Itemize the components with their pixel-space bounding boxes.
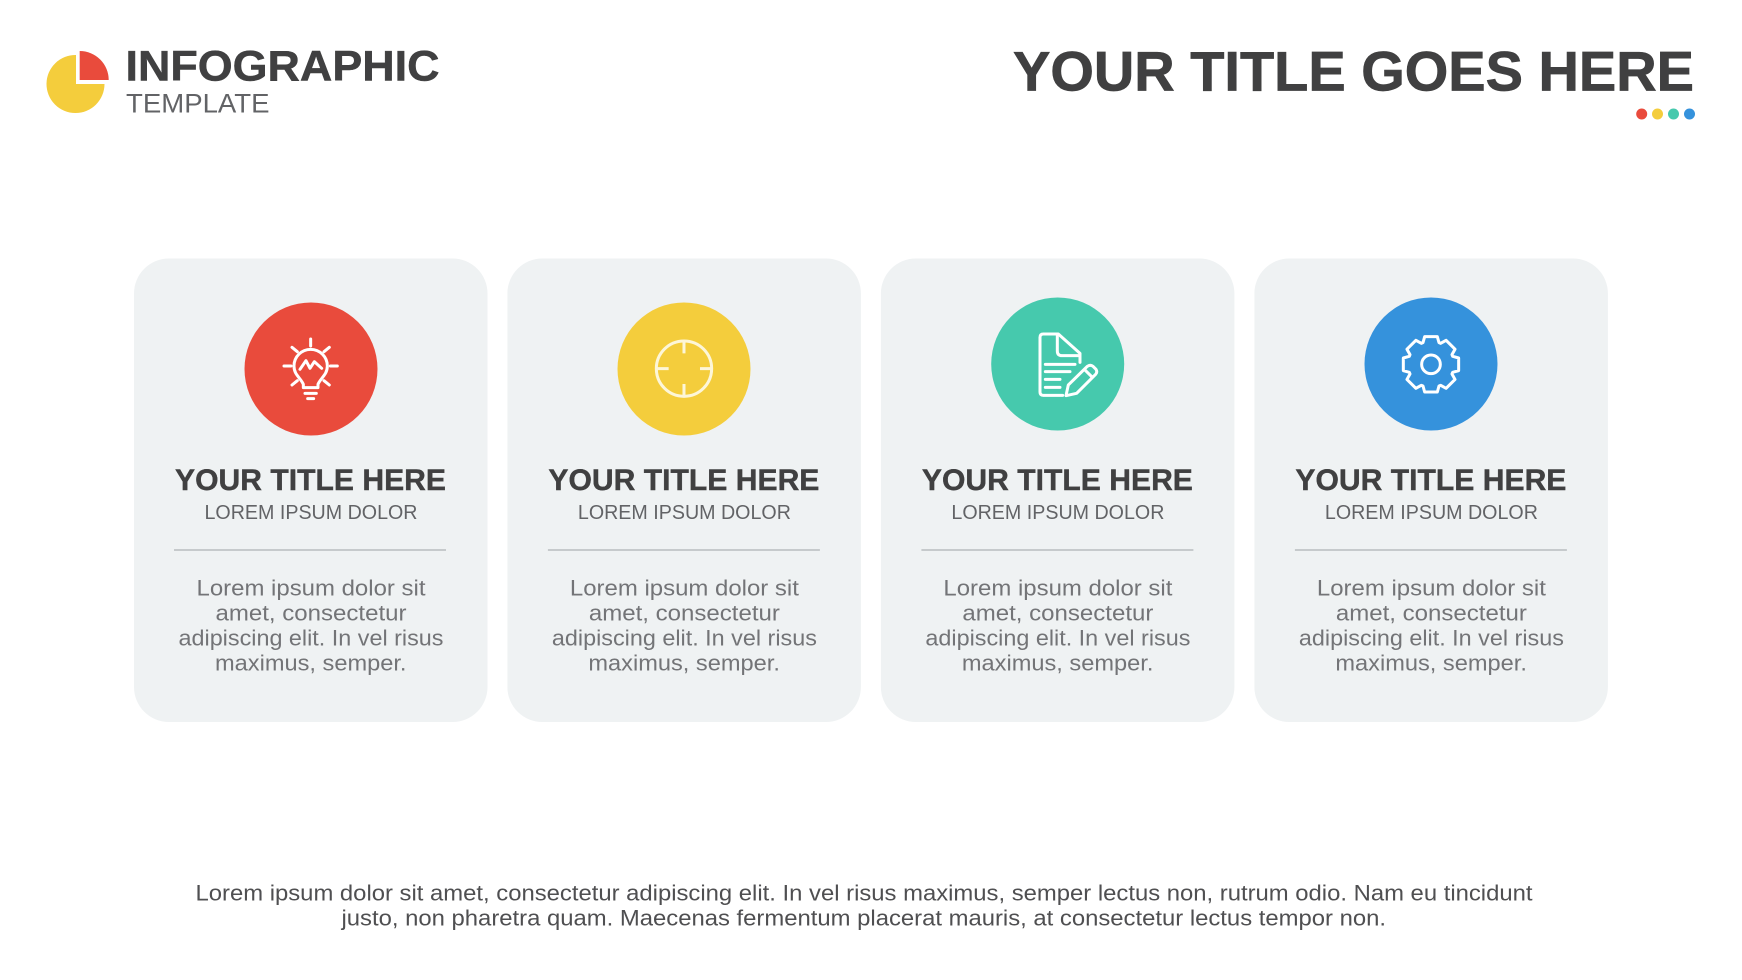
footer text [196,880,1533,930]
icon: document with pencil [1040,334,1097,396]
icon: crosshair target [656,341,712,396]
logo: pie chart icon [46,51,109,113]
panel: card 2 [507,258,861,722]
card 3 body text: Lorem ipsum dolor sit [943,576,1173,600]
card 2 heading: YOUR TITLE HERE [548,464,819,497]
card 3 subheading: LOREM IPSUM DOLOR [951,502,1164,524]
card 4 body text: Lorem ipsum dolor sit [1317,576,1547,600]
card 4 subheading: LOREM IPSUM DOLOR [1325,502,1538,524]
card 1 body text: amet, consectetur [216,600,407,626]
card 2 body text: maximus, semper. [588,650,780,676]
card 1 icon circle [244,302,378,436]
card 4 body text: amet, consectetur [1336,600,1527,626]
card 1 heading: YOUR TITLE HERE [175,464,446,497]
decorative colour dots [1636,108,1695,120]
card 3 body text: maximus, semper. [962,650,1153,676]
card 3 body text [925,576,1190,676]
card 1 body text [178,576,444,676]
card 3 icon circle [991,298,1124,430]
card 1 background [134,258,488,722]
logo text: TEMPLATE [126,89,270,119]
card 3 body text: amet, consectetur [962,600,1154,626]
card 2 body text: Lorem ipsum dolor sit [570,576,800,600]
card 1 subheading: LOREM IPSUM DOLOR [204,502,418,524]
card 1 body text: maximus, semper. [215,650,406,676]
card 2 body text [552,576,817,676]
logo text [126,42,440,119]
card 2 icon circle [618,302,750,436]
card 4 body text: maximus, semper. [1335,650,1527,676]
card 4 icon circle [1364,298,1498,430]
card 2 body text: amet, consectetur [589,600,780,626]
footer text: justo, non pharetra quam. Maecenas fermentum placerat mauris, at consectetur lectus tempor non. [340,906,1386,930]
card 1 body text: Lorem ipsum dolor sit [196,576,426,600]
card 4 heading: YOUR TITLE HERE [1295,464,1566,497]
card 3 background [881,258,1234,722]
panel: card 3 [881,258,1234,722]
panel: card 4 [1254,258,1608,722]
card 2 subheading: LOREM IPSUM DOLOR [578,502,791,524]
panel: card 1 [134,258,488,722]
card 3 body text: adipiscing elit. In vel risus [925,626,1190,650]
icon: light bulb [284,339,337,399]
main title: YOUR TITLE GOES HERE [1013,40,1694,102]
icon: gear [1403,337,1459,392]
logo text: INFOGRAPHIC [126,42,440,90]
card 2 background [507,258,861,722]
card 4 body text [1299,576,1564,676]
card 3 heading: YOUR TITLE HERE [922,464,1193,497]
card 4 background [1254,258,1608,722]
card 1 body text: adipiscing elit. In vel risus [178,626,444,650]
card 4 body text: adipiscing elit. In vel risus [1299,626,1564,650]
footer text: Lorem ipsum dolor sit amet, consectetur adipiscing elit. In vel risus maximus, semper lectus non, rutrum odio. Nam eu tincidunt [196,880,1533,906]
card 2 body text: adipiscing elit. In vel risus [552,626,817,650]
